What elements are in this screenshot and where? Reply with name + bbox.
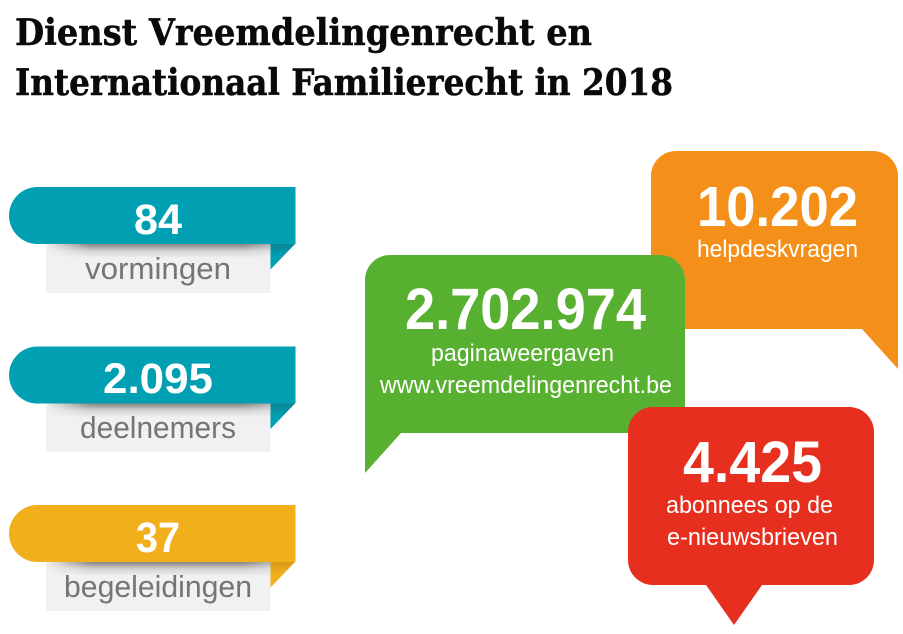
label: helpdeskvragen: helpdeskvragen xyxy=(697,236,858,263)
label: paginaweergaven: paginaweergaven xyxy=(431,340,614,367)
panel: deelnemers ribbon xyxy=(9,346,296,452)
panel: vormingen ribbon xyxy=(9,187,295,293)
number: 84: 84 xyxy=(134,196,182,244)
label: website: www.vreemdelingenrecht.be xyxy=(379,372,672,399)
label: abonnees op de: abonnees op de xyxy=(666,492,833,519)
title: Internationaal Familierecht in 2018 xyxy=(15,62,673,104)
title xyxy=(15,12,673,104)
number: 10.202: 10.202 xyxy=(697,175,858,239)
label: e-nieuwsbrieven: e-nieuwsbrieven xyxy=(667,524,838,551)
number: 4.425: 4.425 xyxy=(683,430,822,495)
label: begeleidingen: begeleidingen xyxy=(64,569,252,604)
label: deelnemers: deelnemers xyxy=(80,410,236,445)
panel: begeleidingen ribbon xyxy=(9,505,296,611)
label: vormingen: vormingen xyxy=(85,251,231,286)
panel: helpdeskvragen speech bubble xyxy=(651,151,898,369)
number: 37: 37 xyxy=(136,514,180,562)
number: 2.702.974: 2.702.974 xyxy=(405,277,646,342)
number: 2.095: 2.095 xyxy=(103,355,213,403)
panel: abonnees speech bubble xyxy=(628,407,874,625)
title: Dienst Vreemdelingenrecht en xyxy=(15,12,592,54)
panel: paginaweergaven speech bubble xyxy=(365,255,685,473)
